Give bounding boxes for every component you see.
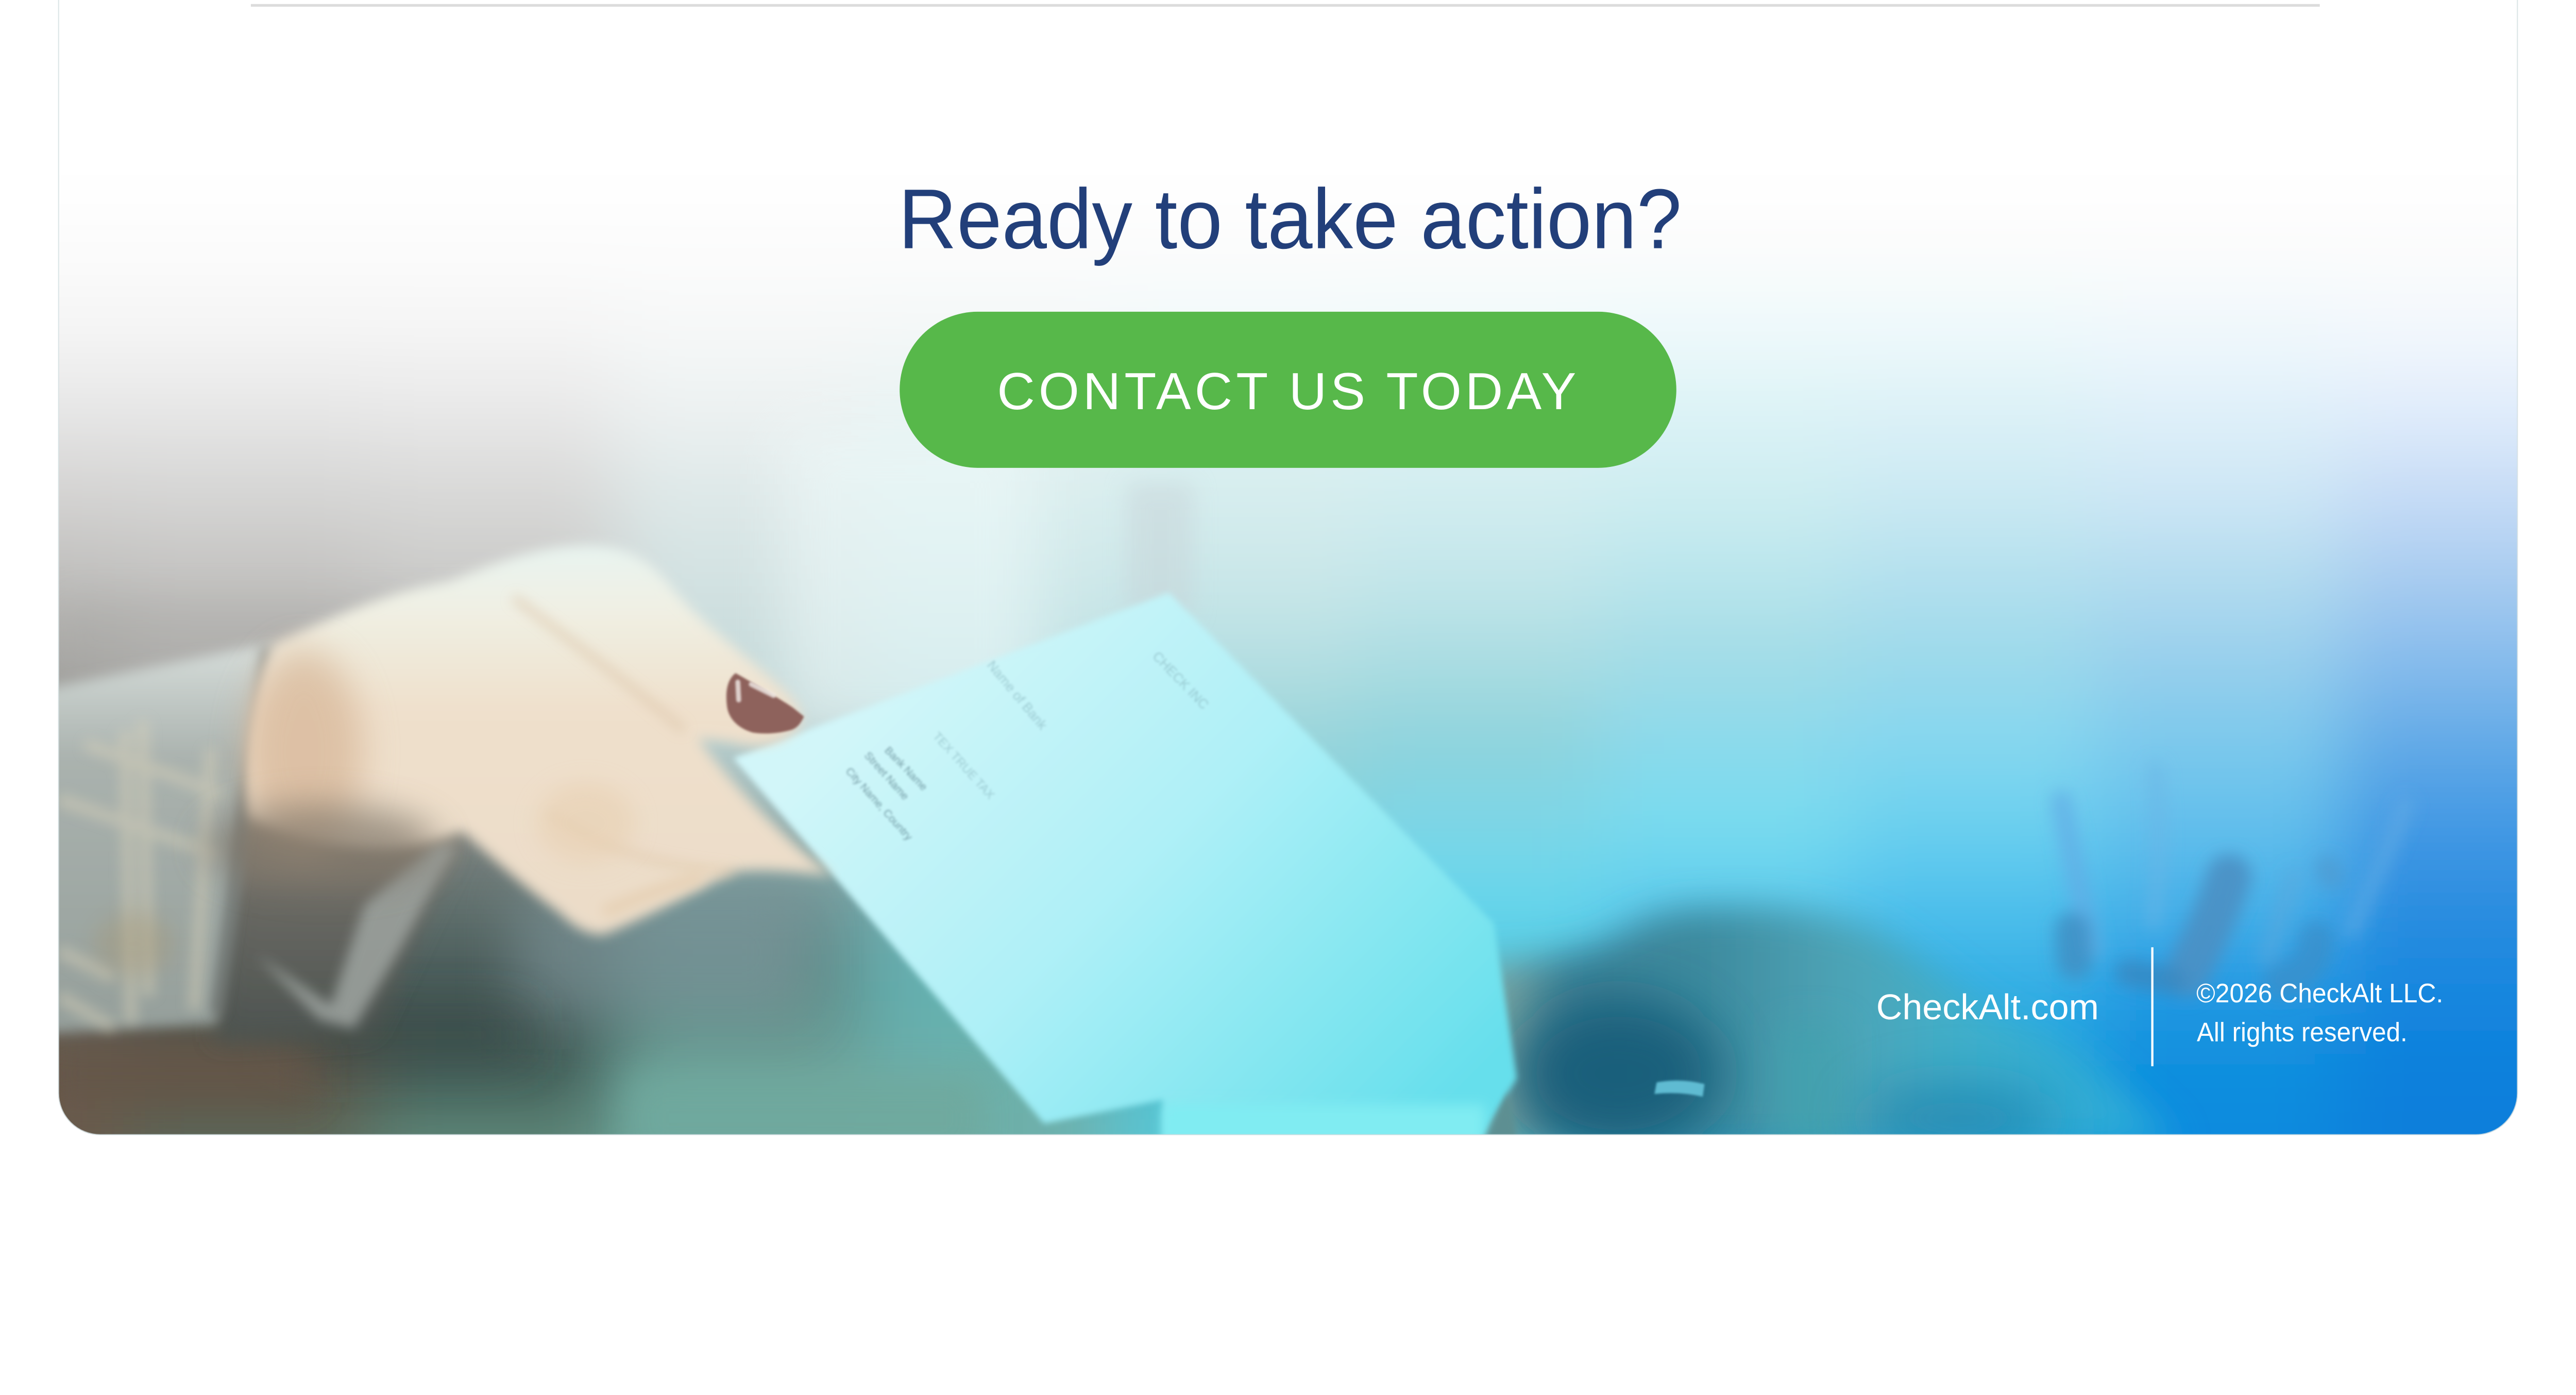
colour field: soft background tones of the photo — [59, 277, 2517, 1135]
cuff fabric fold — [257, 845, 456, 1028]
panel: photo background with white fade — [59, 277, 2517, 1135]
check printed details: Bank Name — [882, 745, 929, 793]
check: CHECK INC — [1149, 648, 1212, 712]
rights line: All rights reserved. — [2197, 1017, 2408, 1047]
button: contact us today: CONTACT US TODAY — [997, 362, 1576, 421]
check printed details: Street Name — [862, 750, 911, 802]
top divider rule — [251, 4, 2320, 7]
heading: Ready to take action? — [899, 172, 1682, 266]
check: TEX TRUE TAX — [930, 729, 997, 802]
button: contact us today — [900, 312, 1676, 468]
footer divider — [2151, 947, 2154, 1066]
panel outline — [59, 0, 2517, 1135]
ring — [1654, 1081, 1704, 1097]
copyright line: ©2026 CheckAlt LLC. — [2196, 979, 2443, 1009]
footer — [1876, 947, 2443, 1066]
check printed details — [843, 745, 929, 843]
table and shadows — [45, 885, 984, 1163]
check — [733, 593, 1518, 1145]
CTA footer infographic — [58, 0, 2518, 1135]
icon: fingernail — [726, 673, 804, 733]
sleeve with plaid — [45, 642, 274, 1033]
check printed details: City Name, Country — [843, 765, 915, 843]
check: Name of Bank — [984, 658, 1051, 733]
icon: giving hand — [206, 545, 835, 935]
website: CheckAlt.com — [1876, 987, 2099, 1027]
icon: receiving hand — [1471, 908, 2178, 1158]
icon: pens in cup (blurred) — [2061, 769, 2405, 982]
background streaks behind the hands — [59, 425, 1194, 738]
cuff interior (dark) — [215, 796, 465, 1042]
